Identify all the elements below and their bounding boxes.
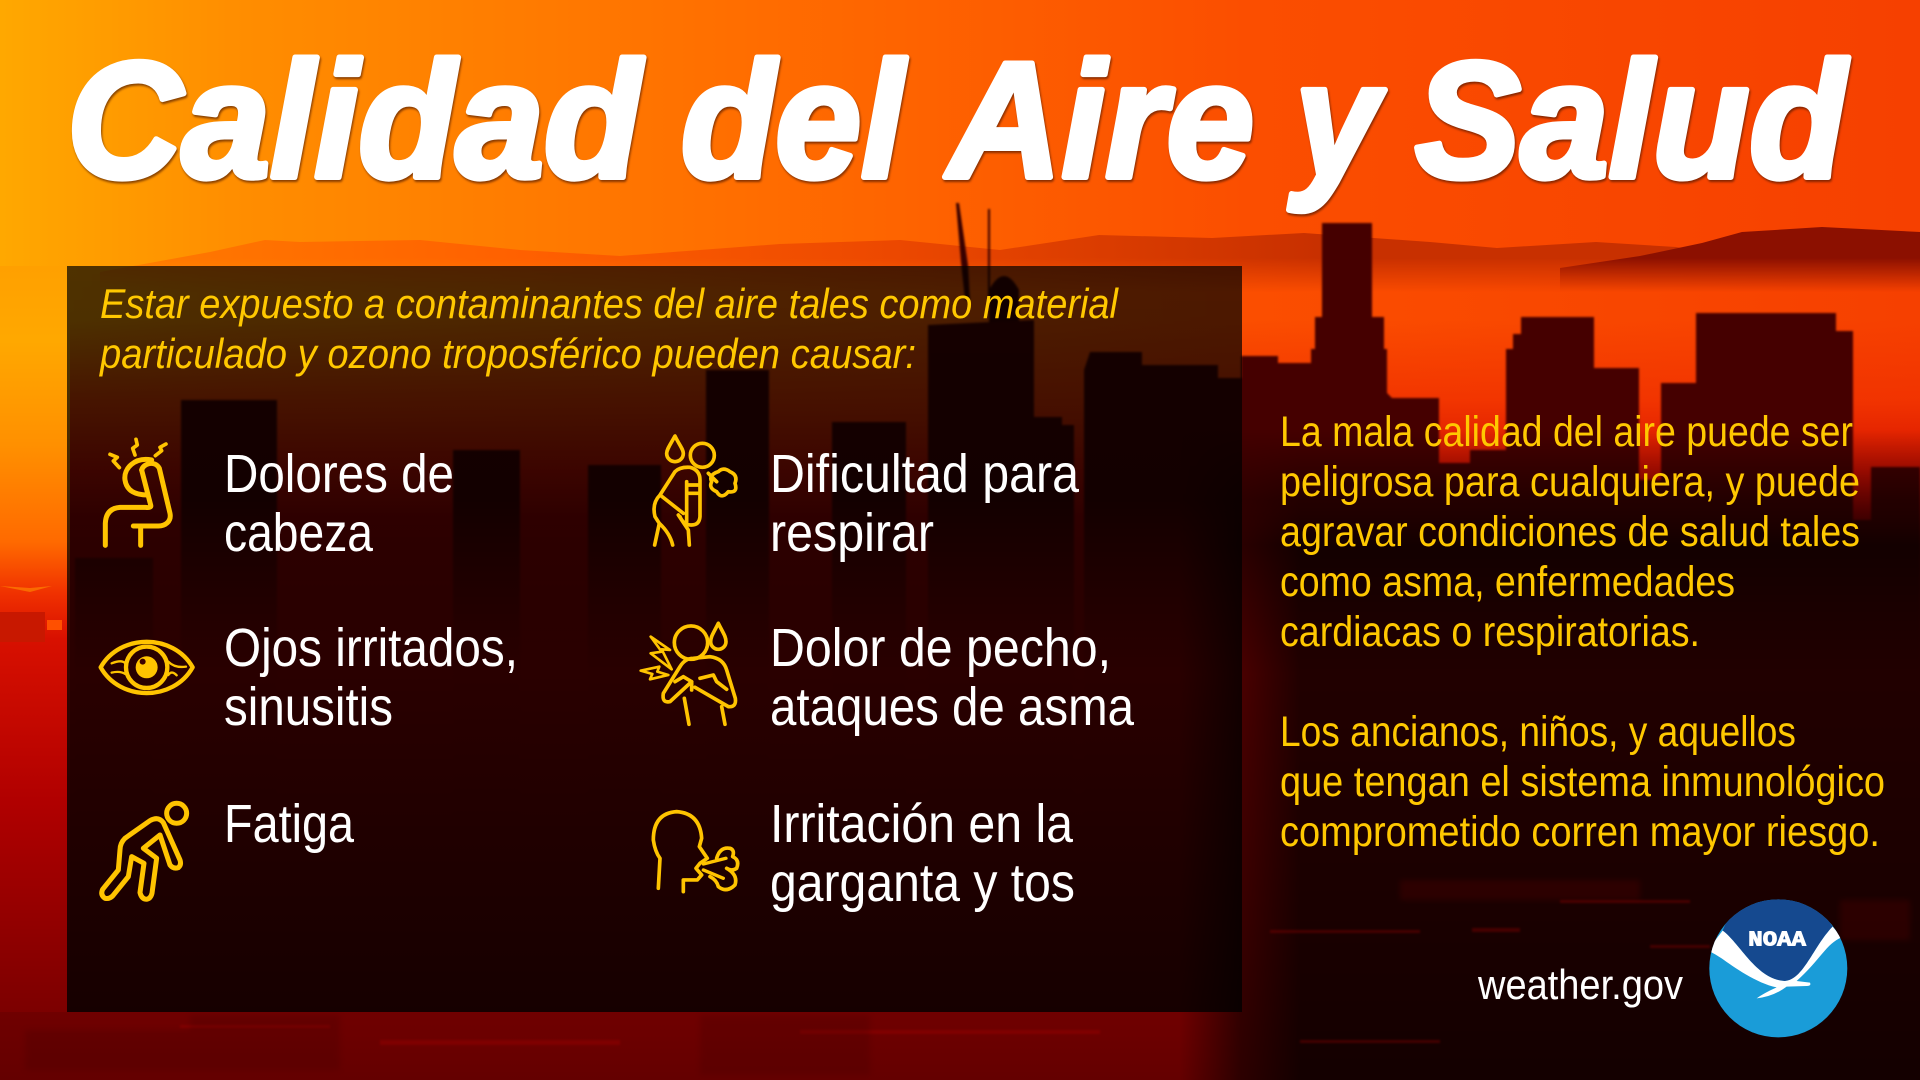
symptom: fatigue xyxy=(102,794,355,899)
symptom: irritated eyes: Ojos irritados, xyxy=(224,618,518,678)
symptom: irritated eyes: sinusitis xyxy=(224,677,393,737)
icon: headache xyxy=(105,439,170,545)
symptom: chest pain xyxy=(641,618,1135,737)
symptom: throat irritation xyxy=(653,794,1075,913)
symptom: difficulty breathing: Dificultad para xyxy=(770,444,1080,504)
text block: at-risk groups: Los ancianos, niños, y aquellos xyxy=(1280,708,1796,756)
text block: general risk: La mala calidad del aire puede ser xyxy=(1280,408,1853,456)
icon: person with chest pain xyxy=(641,623,736,724)
icon: person short of breath xyxy=(654,436,736,545)
symptom: throat irritation: garganta y tos xyxy=(770,853,1075,913)
website: weather.gov xyxy=(1477,961,1683,1008)
title: y xyxy=(1289,28,1386,212)
panel: symptoms xyxy=(67,266,1242,1012)
icon: eye xyxy=(101,642,193,693)
intro text: particulado y ozono troposférico pueden causar: xyxy=(98,330,916,377)
symptom: fatigue: Fatiga xyxy=(224,794,355,854)
title: Calidad xyxy=(67,28,644,212)
symptom: throat irritation: Irritación en la xyxy=(770,794,1074,854)
icon: tired person xyxy=(102,803,187,899)
symptom: difficulty breathing xyxy=(654,436,1080,563)
logo: NOAA: NOAA xyxy=(1748,929,1806,953)
symptom: headaches xyxy=(105,439,454,563)
text block: at-risk groups xyxy=(1280,708,1885,856)
title: Salud xyxy=(1415,28,1849,212)
title: Aire xyxy=(944,28,1254,212)
intro text: Estar expuesto a contaminantes del aire tales como material xyxy=(100,280,1120,327)
logo: NOAA xyxy=(1708,890,1847,1037)
text block: general risk xyxy=(1280,408,1860,656)
icon: person coughing xyxy=(653,812,738,892)
text block: general risk: peligrosa para cualquiera, y puede xyxy=(1280,458,1860,506)
symptom: chest pain: Dolor de pecho, xyxy=(770,618,1111,678)
symptom: headaches: Dolores de xyxy=(224,444,454,504)
intro text xyxy=(98,280,1120,377)
symptom: chest pain: ataques de asma xyxy=(770,677,1135,737)
title xyxy=(67,28,1849,212)
text block: general risk: como asma, enfermedades xyxy=(1280,558,1735,606)
symptom: difficulty breathing: respirar xyxy=(770,503,934,563)
symptom: irritated eyes xyxy=(101,618,518,737)
text block: general risk: cardiacas o respiratorias. xyxy=(1280,608,1700,656)
symptom: headaches: cabeza xyxy=(224,503,374,563)
title: del xyxy=(681,28,907,212)
